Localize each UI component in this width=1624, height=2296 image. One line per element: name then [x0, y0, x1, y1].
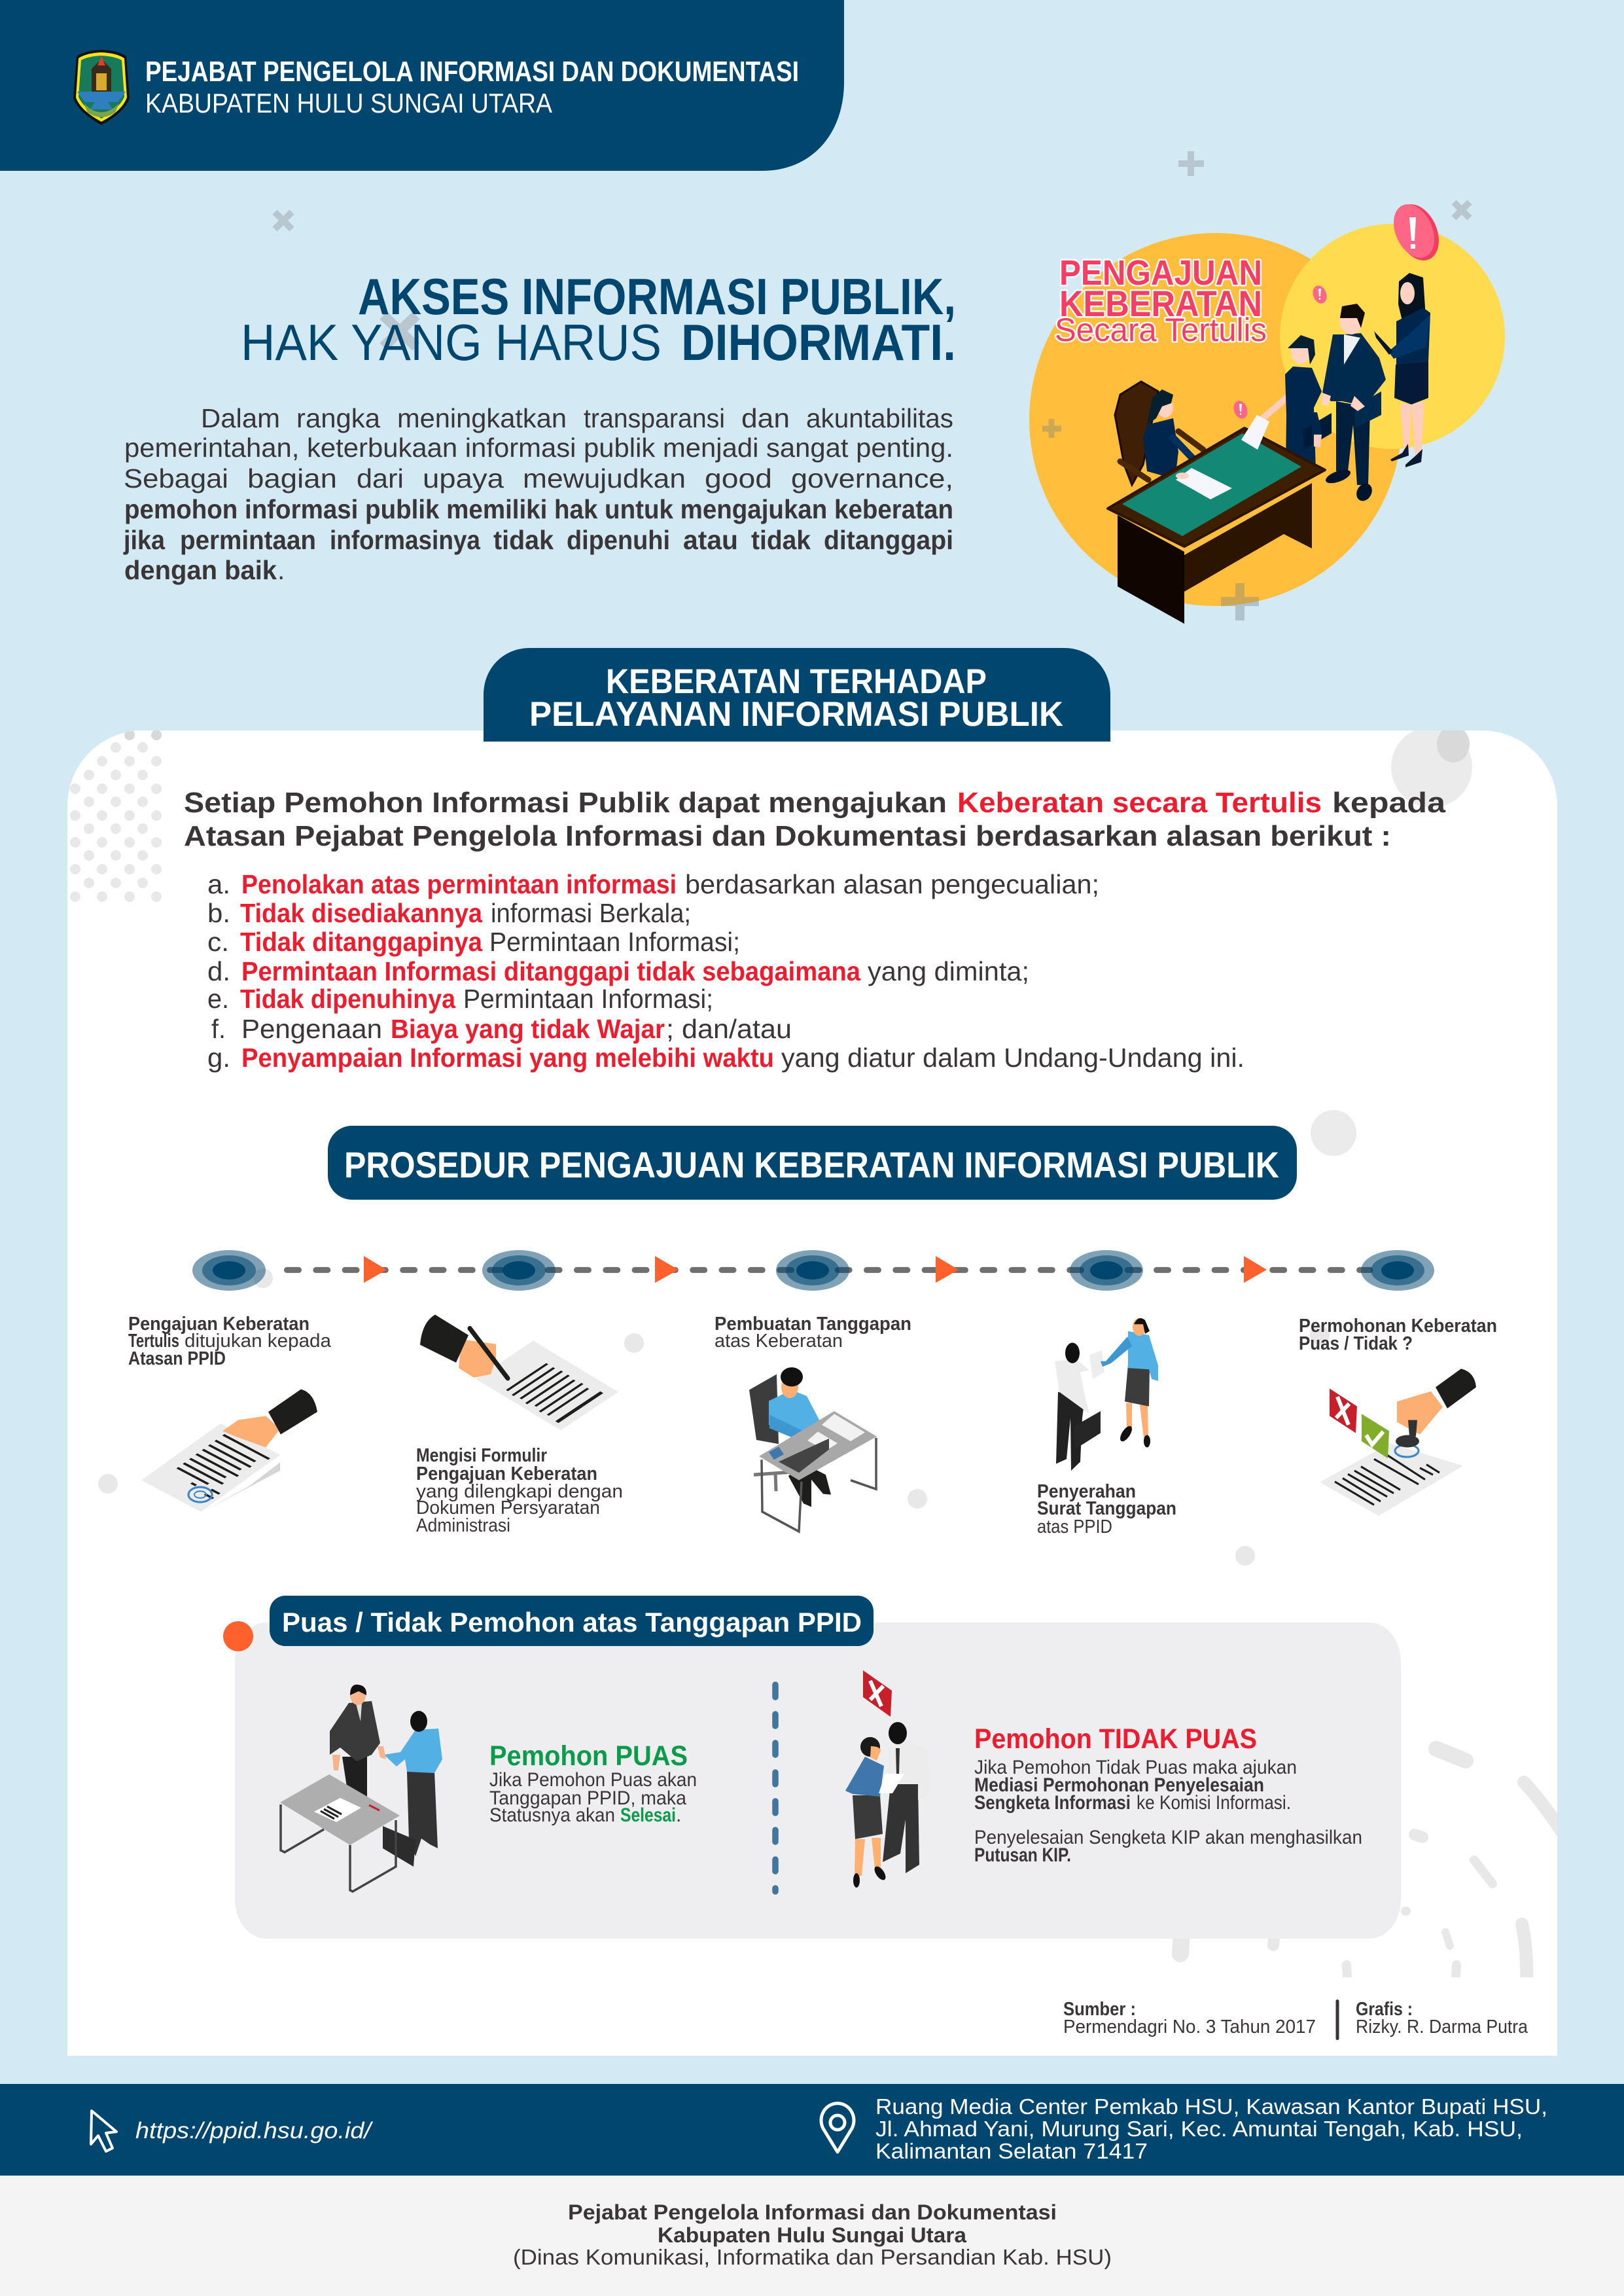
text block: satisfied outcome: .: [676, 1804, 681, 1826]
intro paragraph: bagian: [247, 463, 337, 493]
step 4 text: [1037, 1481, 1176, 1537]
list: grounds for objection: [207, 869, 1244, 1073]
bottom strip: institution name: (Dinas Komunikasi, Informatika dan Persandian Kab. HSU): [513, 2245, 1112, 2269]
credits: source and graphics: Permendagri No. 3 Tahun 2017: [1063, 2017, 1316, 2037]
paper being handed over: [1241, 415, 1269, 450]
list: grounds for objection: informasi Berkala;: [491, 898, 691, 928]
step 1 illustration: hand passing signed document: [141, 1390, 317, 1512]
header title: PEJABAT PENGELOLA INFORMASI DAN DOKUMENTASI: [145, 56, 799, 88]
list: grounds for objection: g.: [207, 1043, 230, 1073]
icon: red reject tile: [863, 1670, 892, 1717]
step 5 text: Permohonan Keberatan: [1299, 1316, 1497, 1336]
text block: objection statement: Keberatan secara Tertulis: [957, 787, 1322, 819]
list: grounds for objection: Permintaan Informasi;: [489, 927, 740, 957]
main title: HAK YANG HARUS: [241, 314, 662, 371]
step 2 illustration: hand signing form: [420, 1315, 618, 1430]
step 3 text: atas Keberatan: [715, 1331, 843, 1352]
illustration: desk with green top: [1108, 415, 1325, 624]
illustration: two people reading a paper: [845, 1722, 930, 1888]
intro paragraph: good: [705, 463, 772, 493]
list: grounds for objection: yang diatur dalam Undang-Undang ini.: [781, 1043, 1244, 1073]
main title: AKSES INFORMASI PUBLIK,: [358, 268, 956, 325]
intro paragraph: tidak: [493, 525, 554, 555]
list: grounds for objection: Penolakan atas permintaan informasi: [241, 869, 677, 899]
list: grounds for objection: Penyampaian Informasi yang melebihi waktu: [241, 1043, 774, 1073]
intro paragraph: permintaan: [180, 525, 316, 555]
panel: main white card: [67, 726, 1567, 2056]
heading banner: prosedur: [328, 1126, 1297, 1200]
footer band: [0, 2084, 1624, 2176]
main title: [241, 268, 956, 371]
list: grounds for objection: c.: [207, 927, 229, 957]
intro paragraph: dari: [357, 463, 404, 493]
figure: woman holding tablet: [1374, 273, 1430, 467]
list: grounds for objection: d.: [207, 956, 230, 986]
step 2 text: Pengajuan Keberatan: [416, 1463, 597, 1484]
step 5 text: [1299, 1316, 1497, 1354]
paper on the desk: [1176, 468, 1232, 499]
decorative marks: pluses on orange: [1042, 419, 1259, 620]
icon: red reject tile: [1330, 1389, 1357, 1433]
illustration heading: [1055, 253, 1267, 348]
step 1 text: ditujukan kepada: [185, 1331, 332, 1352]
intro paragraph: [123, 403, 953, 585]
heading tab: keberatan: PELAYANAN INFORMASI PUBLIK: [529, 695, 1063, 734]
step 2 text: Dokumen Persyaratan: [416, 1498, 600, 1518]
intro paragraph: pemohon informasi publik memiliki hak untuk mengajukan keberatan: [124, 494, 953, 524]
illustration heading: Secara Tertulis: [1055, 312, 1267, 348]
bottom strip: institution name: [0, 2176, 1624, 2296]
illustration: handshake at a table: [280, 1685, 442, 1892]
text block: satisfied outcome: Pemohon PUAS: [489, 1740, 688, 1772]
step 4 illustration: handing over a response letter: [1055, 1318, 1158, 1471]
step 1 text: Pengajuan Keberatan: [128, 1314, 309, 1335]
intro paragraph: atau: [683, 525, 738, 555]
icon: location pin: [821, 2104, 854, 2152]
bottom strip: institution name: Kabupaten Hulu Sungai Utara: [658, 2223, 966, 2247]
heading tab: keberatan: [484, 648, 1110, 742]
figure: woman handing a paper: [1262, 335, 1332, 471]
intro paragraph: dan: [741, 403, 790, 433]
icon: regency crest logo: [73, 50, 130, 125]
step 1 text: [128, 1314, 332, 1369]
website link: https://ppid.hsu.go.id/: [135, 2118, 374, 2144]
intro paragraph: informasinya: [330, 525, 481, 555]
yellow circle backdrop: [1280, 224, 1505, 449]
list: grounds for objection: berdasarkan alasan pengecualian;: [685, 869, 1099, 899]
heading banner: prosedur: PROSEDUR PENGAJUAN KEBERATAN INFORMASI PUBLIK: [344, 1144, 1279, 1185]
intro paragraph: pemerintahan, keterbukaan informasi publik menjadi sangat penting.: [124, 433, 953, 463]
step 4 text: Surat Tanggapan: [1037, 1498, 1176, 1519]
intro paragraph: dipenuhi: [567, 525, 670, 555]
text block: objection statement: [184, 787, 1446, 852]
icon: green approve tile: [1362, 1414, 1389, 1458]
text block: satisfied outcome: Jika Pemohon Puas akan: [489, 1769, 697, 1791]
intro paragraph: Sebagai: [124, 463, 228, 493]
list: grounds for objection: ; dan/atau: [666, 1014, 792, 1044]
heading tab: keberatan: KEBERATAN TERHADAP: [606, 662, 987, 701]
intro paragraph: Dalam: [201, 403, 280, 433]
step 1 text: Tertulis: [128, 1331, 179, 1352]
credits: source and graphics: Grafis :: [1356, 1999, 1413, 2020]
icon: cursor: [91, 2111, 116, 2151]
intro paragraph: jika: [123, 525, 166, 555]
text block: not satisfied outcome: Mediasi Permohonan Penyelesaian: [974, 1774, 1264, 1796]
step 2 text: [416, 1445, 623, 1536]
text block: not satisfied outcome: Jika Pemohon Tidak Puas maka ajukan: [974, 1757, 1297, 1778]
step 3 text: Pembuatan Tanggapan: [715, 1314, 911, 1335]
intro paragraph: rangka: [296, 403, 380, 433]
list: grounds for objection: Pengenaan: [241, 1014, 382, 1044]
text block: not satisfied outcome: Penyelesaian Sengketa KIP akan menghasilkan: [974, 1827, 1362, 1848]
decorative orange dot: [223, 1621, 253, 1651]
step 1 text: Atasan PPID: [128, 1348, 226, 1369]
main title: DIHORMATI.: [681, 314, 956, 371]
text block: objection statement: Atasan Pejabat Pengelola Informasi dan Dokumentasi berdasarkan alasan berikut :: [184, 820, 1391, 852]
credits: source and graphics: Sumber :: [1063, 1999, 1136, 2020]
address: Kalimantan Selatan 71417: [875, 2139, 1148, 2163]
step 5 text: Puas / Tidak ?: [1299, 1333, 1413, 1354]
step 3 text: [715, 1314, 911, 1352]
icon: small exclamation badges: [1231, 283, 1329, 421]
intro paragraph: akuntabilitas: [806, 403, 953, 433]
credits: source and graphics: [1063, 1999, 1528, 2040]
text block: satisfied outcome: Selesai: [620, 1804, 676, 1826]
illustration heading: PENGAJUAN: [1059, 253, 1262, 293]
list: grounds for objection: b.: [207, 898, 230, 928]
list: grounds for objection: Biaya yang tidak Wajar: [391, 1014, 665, 1044]
text block: satisfied outcome: Statusnya akan: [489, 1804, 615, 1826]
arrows between steps: [364, 1256, 1267, 1283]
text block: not satisfied outcome: Putusan KIP.: [974, 1844, 1071, 1866]
figure: seated official in chair: [1115, 382, 1203, 485]
intro paragraph: tidak: [751, 525, 811, 555]
address: [875, 2094, 1547, 2163]
orange circle backdrop: [1029, 233, 1402, 606]
intro paragraph: upaya: [423, 463, 504, 493]
decorative dot grid: [70, 726, 1472, 1566]
header band: [0, 0, 844, 171]
text block: not satisfied outcome: Pemohon TIDAK PUAS: [974, 1723, 1257, 1755]
step 3 illustration: person working at a desk: [749, 1367, 877, 1532]
intro paragraph: ditanggapi: [824, 525, 953, 555]
step 4 text: Penyerahan: [1037, 1481, 1136, 1502]
illustration heading: KEBERATAN: [1059, 283, 1262, 324]
dashed divider: [772, 1685, 779, 1892]
list: grounds for objection: f.: [211, 1014, 226, 1044]
intro paragraph: .: [277, 555, 285, 585]
text block: not satisfied outcome: ke Komisi Informasi.: [1137, 1792, 1291, 1814]
decorative brush strokes: [1180, 1749, 1567, 1990]
address: Jl. Ahmad Yani, Murung Sari, Kec. Amuntai Tengah, Kab. HSU,: [875, 2117, 1523, 2141]
list: grounds for objection: Permintaan Informasi ditanggapi tidak sebagaimana: [241, 956, 861, 986]
bottom strip: institution name: Pejabat Pengelola Informasi dan Dokumentasi: [568, 2200, 1057, 2224]
intro paragraph: meningkatkan: [397, 403, 567, 433]
list: grounds for objection: e.: [207, 984, 229, 1014]
step 2 text: yang dilengkapi dengan: [416, 1481, 623, 1502]
list: grounds for objection: Permintaan Informasi;: [463, 984, 713, 1014]
panel: satisfied or not satisfied outcome: [223, 1596, 1401, 1939]
text block: objection statement: Setiap Pemohon Informasi Publik dapat mengajukan: [184, 787, 947, 819]
text block: objection statement: kepada: [1332, 787, 1446, 819]
intro paragraph: governance,: [791, 463, 953, 493]
illustration: filing a written objection: [1029, 198, 1505, 624]
header subtitle: KABUPATEN HULU SUNGAI UTARA: [145, 88, 552, 118]
list: grounds for objection: Tidak disediakannya: [240, 898, 483, 928]
intro paragraph: transparansi: [584, 403, 725, 433]
step 5 illustration: stamping with approve or reject: [1320, 1369, 1476, 1516]
timeline: five nodes with dashed connectors: [192, 1250, 1434, 1291]
intro paragraph: mewujudkan: [523, 463, 686, 493]
icon: exclamation badge: [1386, 198, 1447, 267]
decorative marks: background crosses and pluses: [275, 151, 1470, 347]
intro paragraph: dengan baik: [124, 555, 277, 585]
panel heading pill: [270, 1596, 874, 1646]
step 2 text: Mengisi Formulir: [416, 1445, 547, 1466]
text block: satisfied outcome: Tanggapan PPID, maka: [489, 1787, 686, 1809]
address: Ruang Media Center Pemkab HSU, Kawasan Kantor Bupati HSU,: [875, 2094, 1547, 2119]
list: grounds for objection: Tidak dipenuhinya: [240, 984, 456, 1014]
list: grounds for objection: a.: [207, 869, 230, 899]
text block: not satisfied outcome: [974, 1723, 1362, 1866]
text block: satisfied outcome: [489, 1740, 697, 1826]
panel heading pill: Puas / Tidak Pemohon atas Tanggapan PPID: [282, 1607, 862, 1638]
list: grounds for objection: yang diminta;: [868, 956, 1029, 986]
text block: not satisfied outcome: Sengketa Informasi: [974, 1792, 1131, 1814]
step 4 text: atas PPID: [1037, 1516, 1112, 1537]
list: grounds for objection: Tidak ditanggapinya: [240, 927, 483, 957]
step 2 text: Administrasi: [416, 1515, 510, 1536]
figure: man with bag and glasses: [1322, 304, 1386, 504]
credits: source and graphics: Rizky. R. Darma Putra: [1356, 2017, 1528, 2037]
